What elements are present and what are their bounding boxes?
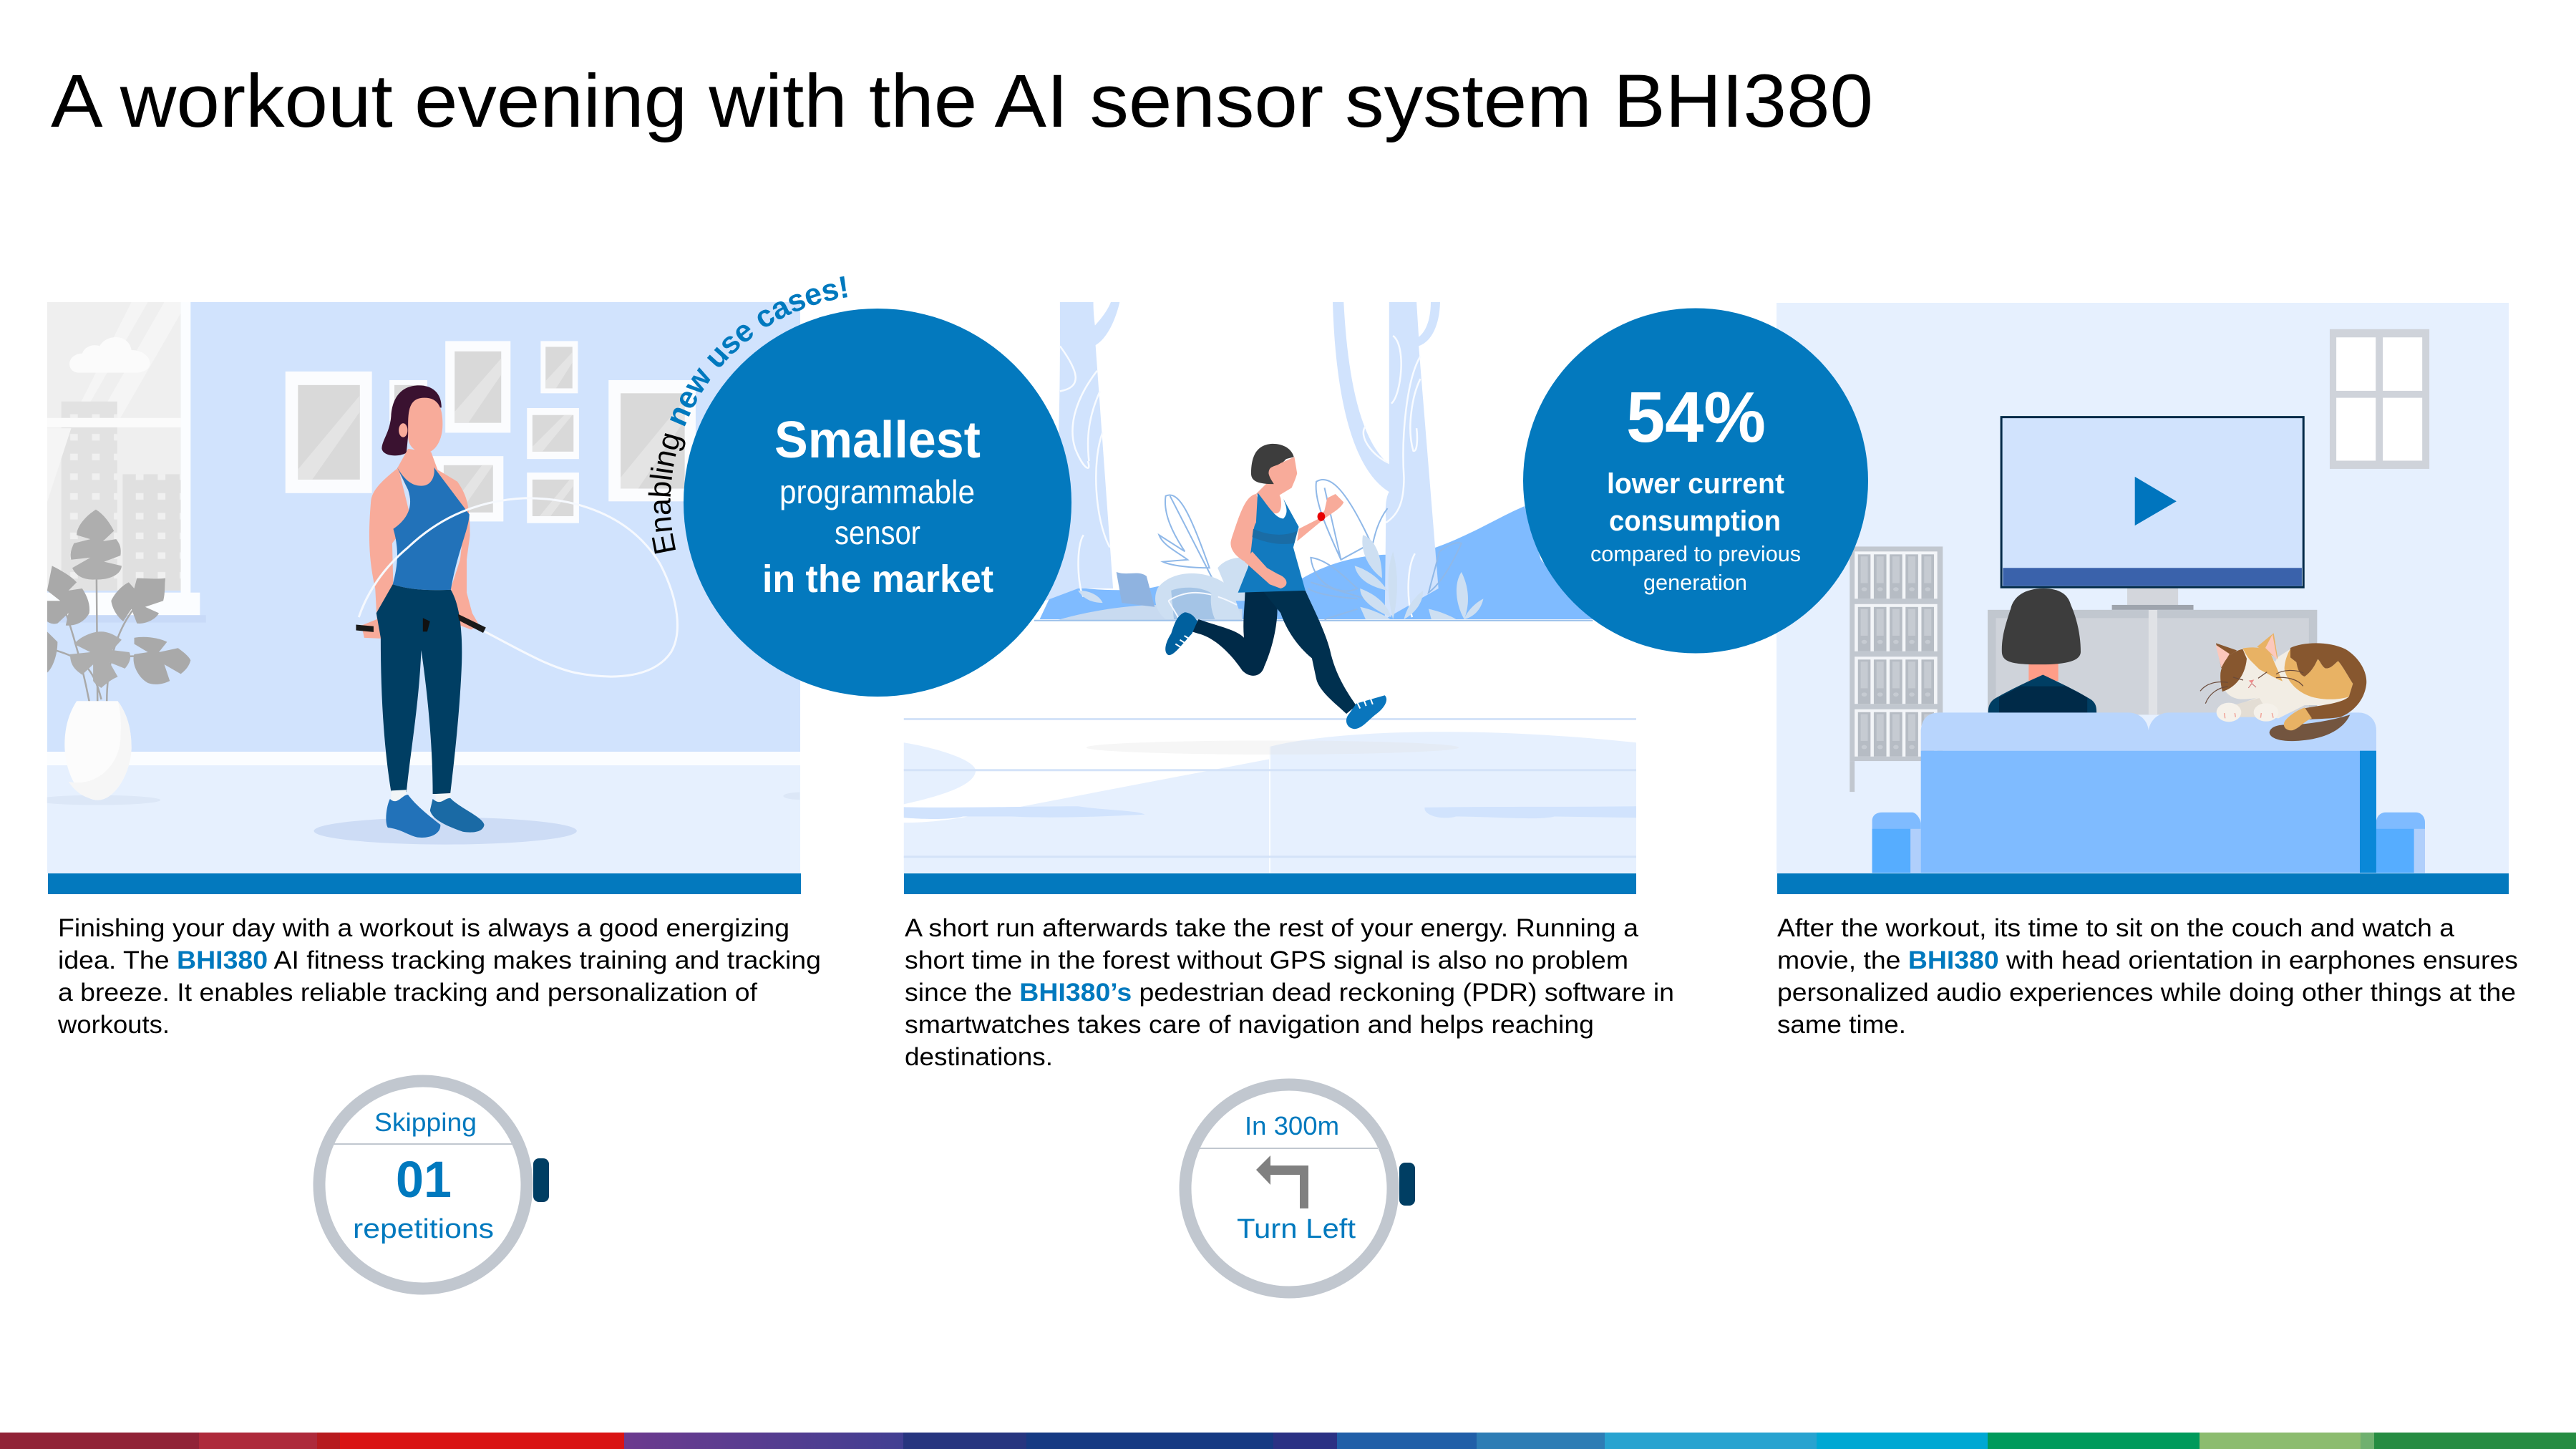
callout: 54 percent circle: consumption [1609, 505, 1781, 537]
text block: couch paragraph: personalized audio experiences while doing other things at the [1777, 979, 2516, 1007]
person watching [1988, 588, 2096, 713]
trees [1045, 302, 1440, 619]
text block: couch paragraph: same time. [1777, 1011, 1906, 1039]
callout: smallest sensor circle: Smallest [774, 412, 981, 469]
smartwatch: skipping repetitions: 01 [396, 1152, 452, 1208]
callout: 54 percent circle [1523, 308, 1868, 653]
footer colour strip [0, 1433, 2576, 1449]
text block: couch paragraph: movie, the BHI380 with head orientation in earphones ensures [1777, 946, 2518, 974]
smartwatch: skipping repetitions [319, 1081, 549, 1289]
text block: workout paragraph [57, 914, 821, 1039]
panel: skipping workout scene [34, 302, 816, 894]
window with city view [47, 302, 206, 623]
woman figure [314, 385, 816, 845]
smartwatch: skipping repetitions: Skipping [374, 1108, 477, 1137]
wall window [2330, 329, 2429, 469]
smartwatch: skipping repetitions: repetitions [353, 1214, 494, 1244]
plants [1159, 480, 1462, 619]
callout: smallest sensor circle: sensor [835, 514, 920, 551]
callout: 54 percent circle: lower current [1607, 468, 1784, 500]
text block: workout paragraph: Finishing your day with a workout is always a good energizing [58, 914, 789, 942]
potted plant [34, 510, 190, 805]
runner figure [1165, 444, 1386, 729]
text block: couch paragraph [1777, 914, 2518, 1039]
callout: 54 percent circle: generation [1643, 570, 1747, 595]
title: A workout evening with the AI sensor system BHI380 [51, 59, 1873, 143]
text block: couch paragraph: After the workout, its time to sit on the couch and watch a [1777, 914, 2455, 942]
callout: 54 percent circle: compared to previous [1590, 541, 1801, 566]
text block: workout paragraph: workouts. [57, 1011, 170, 1039]
panel: couch and movie scene [1777, 303, 2509, 894]
curved text: enabling new use cases: Enabling new use cases! [648, 276, 847, 554]
smartwatch: turn left navigation: In 300m [1245, 1111, 1339, 1140]
bookshelf [1850, 546, 1943, 792]
jump rope [359, 498, 677, 677]
callout: smallest sensor circle [684, 309, 1071, 697]
picture frames [286, 341, 696, 523]
callout: smallest sensor circle: programmable [779, 473, 975, 510]
text block: workout paragraph: idea. The BHI380 AI fitness tracking makes training and tracking [58, 946, 821, 974]
tv cabinet [1988, 610, 2317, 714]
icon: turn left arrow [1256, 1155, 1308, 1208]
text block: run paragraph: A short run afterwards take the rest of your energy. Running a [905, 914, 1639, 942]
sofa [1872, 712, 2425, 873]
callout: smallest sensor circle: in the market [762, 558, 993, 601]
hills [1040, 506, 1593, 619]
text block: run paragraph: short time in the forest without GPS signal is also no problem [905, 946, 1628, 974]
smartwatch: turn left navigation [1185, 1085, 1415, 1292]
text block: run paragraph: destinations. [905, 1043, 1053, 1071]
road [904, 719, 1636, 873]
tv screen with play button [2001, 417, 2303, 610]
callout: 54 percent circle: 54% [1626, 377, 1766, 457]
panel: forest run scene [904, 302, 1636, 894]
smartwatch: turn left navigation: Turn Left [1237, 1214, 1356, 1244]
text block: run paragraph: since the BHI380’s pedestrian dead reckoning (PDR) software in [905, 979, 1674, 1007]
text block: workout paragraph: a breeze. It enables reliable tracking and personalization of [58, 979, 757, 1007]
text block: run paragraph [905, 914, 1674, 1071]
text block: run paragraph: smartwatches takes care of navigation and helps reaching [905, 1011, 1594, 1039]
sleeping cat [2200, 633, 2366, 741]
